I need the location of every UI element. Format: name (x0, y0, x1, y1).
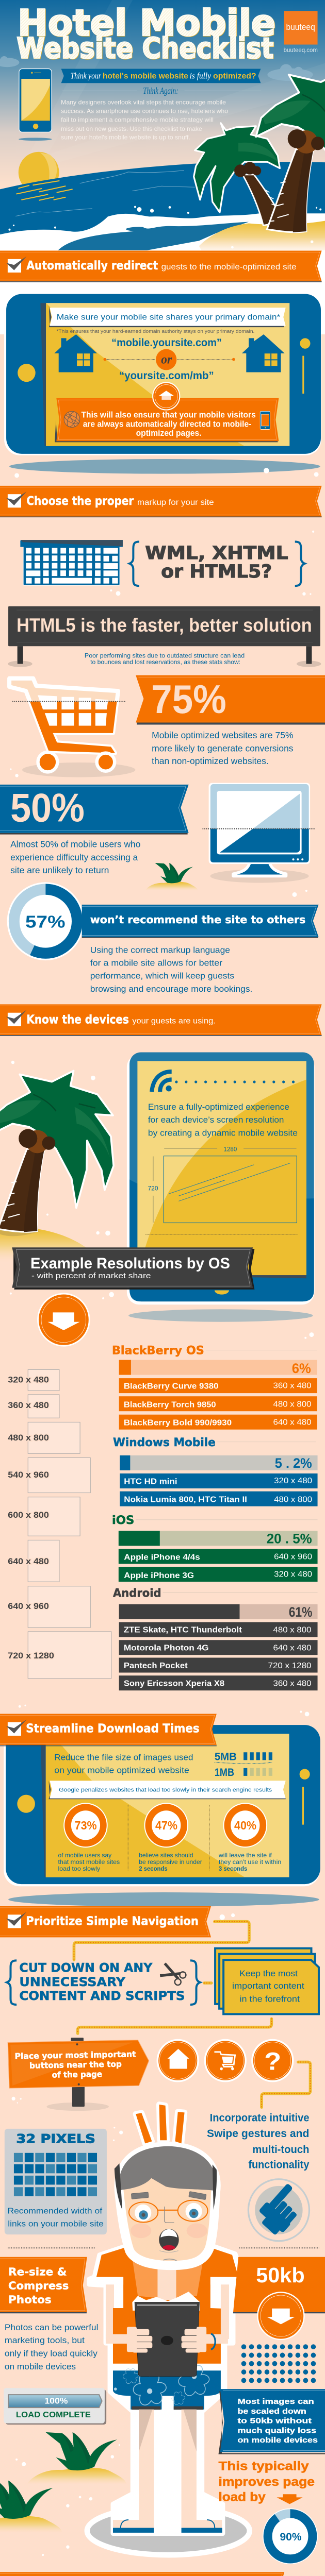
chart: Windows Mobile: Windows Mobile (113, 1436, 216, 1449)
legs (113, 2410, 222, 2528)
chart: Windows Mobile (113, 1436, 318, 1506)
intro text: success. As smartphone use continues to rise, hoteliers who (61, 108, 228, 115)
panel: 32 pixels: Recommended width of (7, 2207, 103, 2215)
chart: Android: 480 x 800 (273, 1625, 312, 1635)
sign: HTML5 is the faster (8, 606, 321, 667)
banner: re-size and compress: Re-size & (8, 2265, 67, 2278)
text: correct markup: browsing and encourage more bookings. (90, 984, 252, 994)
banner: automatically redirect (0, 251, 322, 282)
ribbon: primary domain: Make sure your mobile site shares your primary domain* (57, 313, 280, 321)
icon: grass (145, 863, 198, 891)
sign: place your most important buttons (8, 2038, 149, 2111)
icons: home cart help buttons (157, 2040, 293, 2081)
text: swipe gestures (207, 2112, 310, 2171)
shadow under phone (8, 1892, 319, 1907)
banner: 50kb: 50kb (256, 2263, 305, 2287)
panel: 32 pixels: 32 PIXELS (16, 2131, 95, 2146)
chart: BlackBerry OS: BlackBerry OS (112, 1344, 204, 1358)
url options (103, 337, 235, 382)
chart: iOS: iOS (112, 1514, 134, 1527)
ribbon: 75%: 75% (151, 677, 226, 722)
panel: download phone (4, 1725, 320, 1886)
chart: resolution boxes: 600 x 800 (8, 1510, 49, 1520)
chart: Windows Mobile: 320 x 480 (274, 1477, 312, 1485)
stat circles: 40% (234, 1819, 256, 1832)
stacked cards: keep the most important (215, 1948, 319, 2014)
text: swipe gestures: functionality (248, 2159, 310, 2171)
ribbon: most images: to 50kb without (237, 2417, 312, 2426)
ribbon: example resolutions: - with percent of market share (31, 1272, 151, 1280)
text: correct markup: performance, which will keep guests (90, 971, 234, 981)
sand island (199, 221, 325, 253)
donut: 90% (263, 2509, 318, 2564)
logo: buuteeq (286, 23, 315, 32)
intro text: fail to implement a comprehensive mobile strategy will (61, 116, 214, 124)
ribbon: 50% (0, 785, 189, 835)
text: file size: on your mobile optimized website (54, 1766, 189, 1775)
ribbon: google penalizes: Google penalizes websites that load too slowly in their search engine results (59, 1787, 272, 1793)
heading: cut down on any unnecessary: CUT DOWN ON ANY (19, 1961, 153, 1975)
heading: cut down on any unnecessary: CONTENT AND SCRIPTS (19, 1989, 185, 2003)
chart: resolution boxes: 640 x 960 (8, 1601, 49, 1611)
icon: down arrow circle (257, 2292, 304, 2340)
text: correct markup: for a mobile site allows for better (90, 958, 223, 968)
footnote: *This ensures that your hard-earned domain authority stays on your primary domain. (56, 329, 254, 334)
panel: domain phone (4, 294, 321, 455)
captions: of mobile users say (58, 1852, 111, 1859)
url options: or (161, 352, 172, 366)
chart: BlackBerry OS (112, 1344, 317, 1430)
ribbon: automatically directed: are always automatically directed to mobile- (83, 419, 251, 429)
sun reflection (17, 181, 72, 200)
icon: wifi (152, 1072, 294, 1092)
eyes and glasses (129, 2200, 208, 2223)
heading: think again: Think Again: (143, 86, 178, 96)
captions: load too slowly (58, 1866, 100, 1872)
text: file size (54, 1752, 193, 1775)
stat text: 75: than non-optimized websites. (152, 756, 269, 766)
url options: “mobile.yoursite.com” (111, 337, 222, 349)
banner: 50kb (233, 2257, 325, 2340)
banner: prioritize simple navigation (0, 1906, 211, 1937)
chart: Android: 360 x 480 (273, 1680, 312, 1688)
text: photos: on mobile devices (5, 2362, 76, 2371)
text: photos: only if they load quickly (5, 2348, 98, 2358)
intro text: Many designers overlook vital steps that encourage mobile (61, 98, 226, 106)
chart: 5MB vs 1MB: 1MB (215, 1767, 234, 1778)
shadow under phone (9, 459, 320, 474)
sign: place your most important buttons: of the page (52, 2070, 102, 2080)
panel: 32 pixels: links on your mobile site (8, 2220, 104, 2229)
intro text: sure your hotel's mobile website is up to snuff. (61, 134, 190, 141)
title: Website Checklist (17, 31, 273, 65)
chart: resolution boxes: 480 x 800 (8, 1433, 49, 1443)
captions: 2 seconds (139, 1866, 168, 1872)
ribbon: 50%: 50% (10, 786, 85, 830)
icon: keyboard (20, 540, 123, 585)
heading: WML XHTML or HTML5: WML, XHTML (145, 543, 288, 564)
bubbles (12, 2097, 123, 2141)
banner: re-size and compress: Photos (8, 2293, 52, 2306)
shadow under tablet (128, 1309, 313, 1322)
captions (58, 1852, 281, 1872)
stat text: 75: Mobile optimized websites are 75% (152, 731, 294, 740)
banner: choose the proper markup: Choose the proper (26, 495, 134, 508)
panel: load complete: 100% (44, 2397, 68, 2406)
icon: scissors (160, 1963, 186, 1985)
text: screen resolution (148, 1102, 298, 1138)
text: correct markup (90, 945, 252, 994)
shorts (113, 2370, 221, 2410)
chart: 5MB vs 1MB: 5MB (215, 1751, 237, 1762)
body outline (89, 2245, 245, 2534)
banner: re-size and compress: Compress (8, 2279, 69, 2292)
mouth (159, 2229, 179, 2261)
stat circles (64, 1803, 267, 1871)
icon: shopping cart (9, 679, 135, 777)
donut: 57% (7, 882, 84, 960)
chart: BlackBerry OS: BlackBerry Curve 9380 (124, 1382, 219, 1391)
ribbon: think your hotel's mobile website: is fully (190, 72, 212, 81)
stat text: 75: more likely to generate conversions (152, 743, 294, 753)
stat circles: 73% (75, 1819, 97, 1832)
chart: BlackBerry OS: 360 x 480 (273, 1381, 312, 1390)
bubbles (19, 1705, 309, 1920)
captions: will leave the site if (218, 1852, 272, 1859)
panel: beach hero scene (0, 0, 325, 253)
heading: WML XHTML or HTML5 (129, 541, 305, 586)
captions: that most mobile sites (58, 1859, 120, 1866)
ocean (0, 162, 325, 252)
diagram: 1280 x 720 (148, 1146, 297, 1223)
stat text: 75 (152, 731, 294, 766)
shirt (96, 2246, 238, 2364)
stat text: 50: Almost 50% of mobile users who (10, 839, 140, 850)
banner: choose the proper markup: markup for your site (137, 498, 214, 507)
captions: they can’t use it within (219, 1859, 281, 1866)
chart: Android: ZTE Skate, HTC Thunderbolt (124, 1625, 242, 1635)
banner: automatically redirect: guests to the mobile-optimized site (161, 263, 297, 272)
banner: know the devices: your guests are using. (132, 1016, 216, 1026)
connector path (74, 1922, 249, 1960)
chart: resolution boxes (8, 1369, 111, 1679)
text: file size: Reduce the file size of images used (54, 1752, 193, 1762)
stacked cards: keep the most important: Keep the most (239, 1969, 298, 1978)
sign: HTML5 is the faster: HTML5 is the faster, better solution (17, 615, 312, 636)
bubbles (14, 468, 319, 596)
ribbon: most images: be scaled down (237, 2408, 306, 2416)
bubbles (10, 768, 307, 897)
hair spikes (136, 2105, 185, 2143)
banner: choose the proper markup (0, 486, 322, 517)
text: improves page load: This typically (218, 2459, 309, 2472)
chart: BlackBerry OS: BlackBerry Bold 990/9930 (124, 1418, 232, 1428)
floor shadow (87, 2506, 250, 2555)
panel: load complete: LOAD COMPLETE (16, 2411, 91, 2419)
chart: iOS (112, 1514, 318, 1582)
ribbon: won't recommend: won’t recommend the site to others (90, 913, 305, 926)
ribbon: think your hotel's mobile website: Think your (71, 72, 102, 81)
bubbles (10, 1061, 114, 1299)
chart: Windows Mobile: Nokia Lumia 800, HTC Titan II (124, 1495, 247, 1504)
lagoon (58, 222, 249, 251)
clouds (0, 56, 313, 81)
text: photos: marketing tools, but (5, 2335, 85, 2345)
dot grid (244, 2347, 315, 2380)
text: swipe gestures: Incorporate intuitive (210, 2112, 309, 2124)
text: improves page load: improves page (218, 2475, 315, 2488)
diagram: 1280 x 720: 720 (148, 1185, 158, 1192)
donut: 57%: 57% (25, 912, 66, 931)
icon: house right (242, 334, 285, 372)
icon: touch gesture (248, 2179, 310, 2241)
ribbon: most images: much quality loss (237, 2427, 316, 2435)
note: poor performing sites: to bounces and lost reservations, as these stats show: (90, 658, 240, 666)
tablet panel (127, 1052, 315, 1304)
donut: 90%: 90% (280, 2531, 302, 2543)
stat circles: 47% (155, 1819, 177, 1832)
chart: Windows Mobile: 5 . 2% (275, 1455, 312, 1471)
chart: resolution boxes: 640 x 480 (8, 1556, 49, 1566)
stacked cards: keep the most important: important content (232, 1981, 304, 1991)
banner: automatically redirect: Automatically redirect (26, 259, 158, 273)
ribbon: example resolutions (12, 1247, 254, 1290)
ribbon: 75% (136, 675, 325, 725)
text: screen resolution: Ensure a fully-optimized experience (148, 1102, 289, 1112)
chart: iOS: 20 . 5% (267, 1531, 312, 1547)
text: correct markup: Using the correct markup language (90, 945, 230, 955)
bubbles (304, 1332, 314, 1339)
ribbon: example resolutions: Example Resolutions by OS (30, 1256, 230, 1272)
stat text: 50: experience difficulty accessing a (10, 853, 138, 862)
ribbon: most images: on mobile devices (237, 2436, 318, 2445)
chart: iOS: Apple iPhone 4/4s (124, 1553, 200, 1562)
chart: Android: 640 x 480 (273, 1644, 312, 1653)
captions: be responsive in under (139, 1859, 202, 1866)
text: screen resolution: by creating a dynamic mobile website (148, 1128, 298, 1138)
icon: grass large (27, 2432, 126, 2485)
icon: grass lower left (0, 2481, 62, 2533)
hands (106, 2327, 228, 2353)
chart: iOS: Apple iPhone 3G (124, 1571, 194, 1580)
bubbles (15, 2444, 297, 2576)
chart: Android: 61% (289, 1604, 313, 1620)
ribbon: think your hotel's mobile website: optimized? (213, 72, 256, 81)
arms (106, 2284, 229, 2339)
icons: home cart help buttons: ? (264, 2048, 281, 2076)
logo (284, 11, 318, 54)
title: Hotel Mobile (18, 3, 275, 44)
chart: iOS: 640 x 960 (274, 1552, 312, 1562)
chart: Android: 720 x 1280 (268, 1662, 312, 1670)
heading: cut down on any unnecessary: UNNECESSARY (19, 1975, 126, 1989)
connector paths (78, 1983, 310, 2107)
ribbon: won't recommend (82, 905, 319, 938)
illustration: palm on sand (0, 1071, 113, 1263)
ribbon: primary domain (49, 306, 286, 327)
chart: BlackBerry OS: 6% (292, 1361, 311, 1376)
icon: small phone (260, 411, 270, 429)
banner: streamline download times: Streamline Download Times (26, 1722, 200, 1735)
banner: prioritize simple navigation: Prioritize Simple Navigation (26, 1914, 199, 1928)
icon: phone (19, 69, 52, 141)
bubbles (8, 206, 321, 248)
captions: 3 seconds (219, 1866, 248, 1872)
text: photos: Photos can be powerful (5, 2323, 98, 2332)
banner: know the devices (0, 1004, 322, 1036)
head (119, 2146, 216, 2265)
icon: house left (54, 334, 97, 372)
chart: Android: Android (113, 1587, 161, 1600)
intro text: miss out on new guests. Use this checklist to make (61, 125, 202, 132)
captions: believe sites should (139, 1852, 193, 1859)
surf foam (0, 213, 325, 253)
icon: arrow down (277, 2494, 303, 2504)
chart: resolution boxes: 720 x 1280 (8, 1651, 54, 1660)
sign: place your most important buttons: Place your most important (14, 2049, 136, 2061)
intro text (61, 98, 228, 141)
text: photos (5, 2323, 98, 2371)
panel: load complete (4, 2388, 106, 2425)
chart: iOS: 320 x 480 (274, 1570, 312, 1579)
eyebrows (131, 2191, 206, 2200)
text: improves page load (218, 2459, 315, 2504)
title (17, 3, 275, 65)
chart: Android (113, 1587, 318, 1690)
banner: mobile optimized booking engine (0, 2572, 284, 2576)
text: swipe gestures: multi-touch (252, 2144, 309, 2156)
chart: Windows Mobile: HTC HD mini (124, 1477, 177, 1486)
note: poor performing sites: Poor performing sites due to outdated structure can lead (85, 652, 245, 659)
chart: Android: Pantech Pocket (124, 1662, 188, 1670)
chart: BlackBerry OS: BlackBerry Torch 9850 (124, 1400, 216, 1409)
banner: streamline download times (0, 1714, 217, 1746)
banner: know the devices: Know the devices (26, 1013, 129, 1027)
url options: “yoursite.com/mb” (119, 370, 214, 382)
wave lines (15, 171, 195, 216)
ribbon: automatically directed: optimized pages. (136, 429, 202, 438)
ribbon: google penalizes (48, 1781, 286, 1799)
icon: globe (63, 411, 80, 428)
icon: monitor (203, 783, 315, 883)
illustration: man holding tablet (87, 2105, 250, 2555)
text: improves page load: load by (218, 2490, 266, 2504)
text: swipe gestures: Swipe gestures and (207, 2128, 309, 2140)
tablet (135, 2302, 200, 2377)
chart: Android: Motorola Photon 4G (124, 1644, 209, 1653)
panel: 32 pixels (5, 2129, 107, 2234)
ribbon: automatically directed: This will also ensure that your mobile visitors (82, 411, 256, 420)
heading: cut down on any unnecessary (7, 1960, 200, 2005)
chart: resolution boxes: 360 x 480 (8, 1400, 49, 1410)
stat text: 50 (10, 839, 140, 875)
chart: resolution boxes: 540 x 960 (8, 1470, 49, 1480)
heading: WML XHTML or HTML5: or HTML5? (161, 562, 272, 582)
chart: resolution boxes: 320 x 480 (8, 1375, 49, 1385)
ribbon: automatically directed (55, 398, 279, 442)
banner: re-size and compress (0, 2257, 87, 2313)
chart: 5MB vs 1MB (215, 1751, 272, 1778)
chart: BlackBerry OS: 480 x 800 (273, 1400, 312, 1409)
ribbon: think your hotel's mobile website: hotel's mobile website (103, 72, 188, 81)
white page start (0, 250, 325, 334)
note: poor performing sites (85, 652, 245, 666)
stacked cards: keep the most important: in the forefront (239, 1994, 300, 2004)
palm trees (194, 71, 325, 232)
ribbon: most images (218, 2389, 325, 2454)
icon: arrow down circle (38, 1294, 89, 1346)
sign: place your most important buttons: buttons near the top (29, 2059, 122, 2071)
text: screen resolution: for each device’s screen resolution (148, 1115, 284, 1125)
icon: sun (19, 152, 59, 193)
diagram: 1280 x 720: 1280 (224, 1146, 237, 1153)
chart: Android: Sony Ericsson Xperia X8 (124, 1680, 224, 1688)
stat text: 50: site are unlikely to return (10, 866, 109, 875)
chart: Windows Mobile: 480 x 800 (274, 1495, 312, 1504)
logo: buuteeq.com (284, 46, 318, 54)
chart: BlackBerry OS: 640 x 480 (273, 1418, 312, 1427)
icon: home circle (153, 382, 180, 410)
ribbon: most images: Most images can (237, 2398, 314, 2406)
ribbon: think your hotel's mobile website (61, 69, 261, 83)
